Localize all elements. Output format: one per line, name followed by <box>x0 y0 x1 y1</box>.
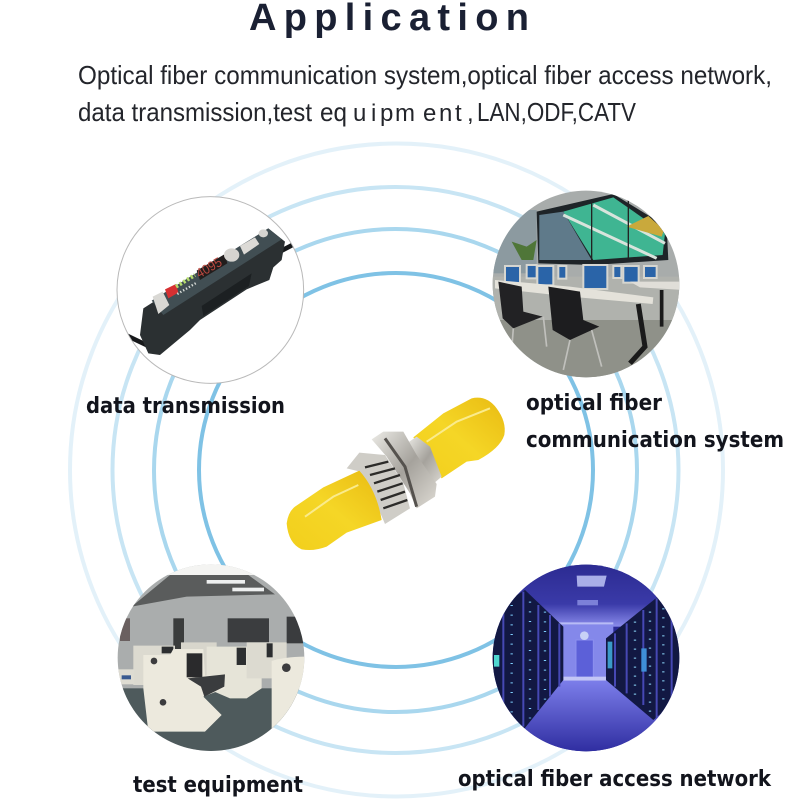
left machine edge <box>118 669 134 684</box>
rear machines <box>133 646 175 685</box>
adapter nut <box>372 432 437 508</box>
adapter right cap <box>413 398 505 478</box>
right racks <box>606 595 683 720</box>
label: data transmission: data transmission <box>86 394 285 419</box>
intro text <box>78 60 772 127</box>
concentric signal rings <box>70 144 723 796</box>
label: optical fiber communication system <box>526 391 784 453</box>
left racks <box>490 590 563 730</box>
sensor display <box>197 254 227 280</box>
panel: server room photo <box>490 562 683 758</box>
intro text: uipment, <box>353 100 474 127</box>
panel: yellow fiber adapter <box>287 398 505 550</box>
floor <box>122 688 300 751</box>
sensor body <box>140 228 285 355</box>
adapter threaded barrel <box>407 437 442 487</box>
front machine <box>143 649 225 732</box>
label: test equipment: test equipment <box>133 773 303 798</box>
ceiling <box>132 575 275 607</box>
end wall and door <box>562 626 614 681</box>
floor <box>500 320 672 378</box>
plant <box>512 240 537 260</box>
intro text: LAN,ODF,CATV <box>477 97 637 127</box>
video wall <box>537 194 668 265</box>
label: optical fiber communication system: optical fiber <box>526 391 662 416</box>
floor <box>496 680 676 752</box>
adapter knurled collar <box>347 453 410 524</box>
adapter left cap <box>287 471 382 550</box>
panel: data transmission photo: 4095 <box>193 254 224 281</box>
sensor buttons <box>224 248 239 262</box>
desks <box>495 280 653 304</box>
panel: data transmission photo <box>117 197 304 383</box>
ceiling <box>498 564 674 627</box>
panel: test equipment photo <box>115 562 308 755</box>
sensor label plate <box>202 273 252 316</box>
right machine <box>272 656 304 728</box>
intro text: data transmission,test <box>78 97 313 127</box>
label: optical fiber access network: optical fiber access network <box>458 767 772 792</box>
sensor cables <box>128 243 293 348</box>
door and windows <box>173 618 184 650</box>
intro text: eq <box>320 97 347 127</box>
panel: control room photo <box>490 188 683 383</box>
monitors <box>505 265 657 289</box>
intro text: Optical fiber communication system,optical fiber access network, <box>78 60 772 90</box>
chairs <box>498 282 543 328</box>
